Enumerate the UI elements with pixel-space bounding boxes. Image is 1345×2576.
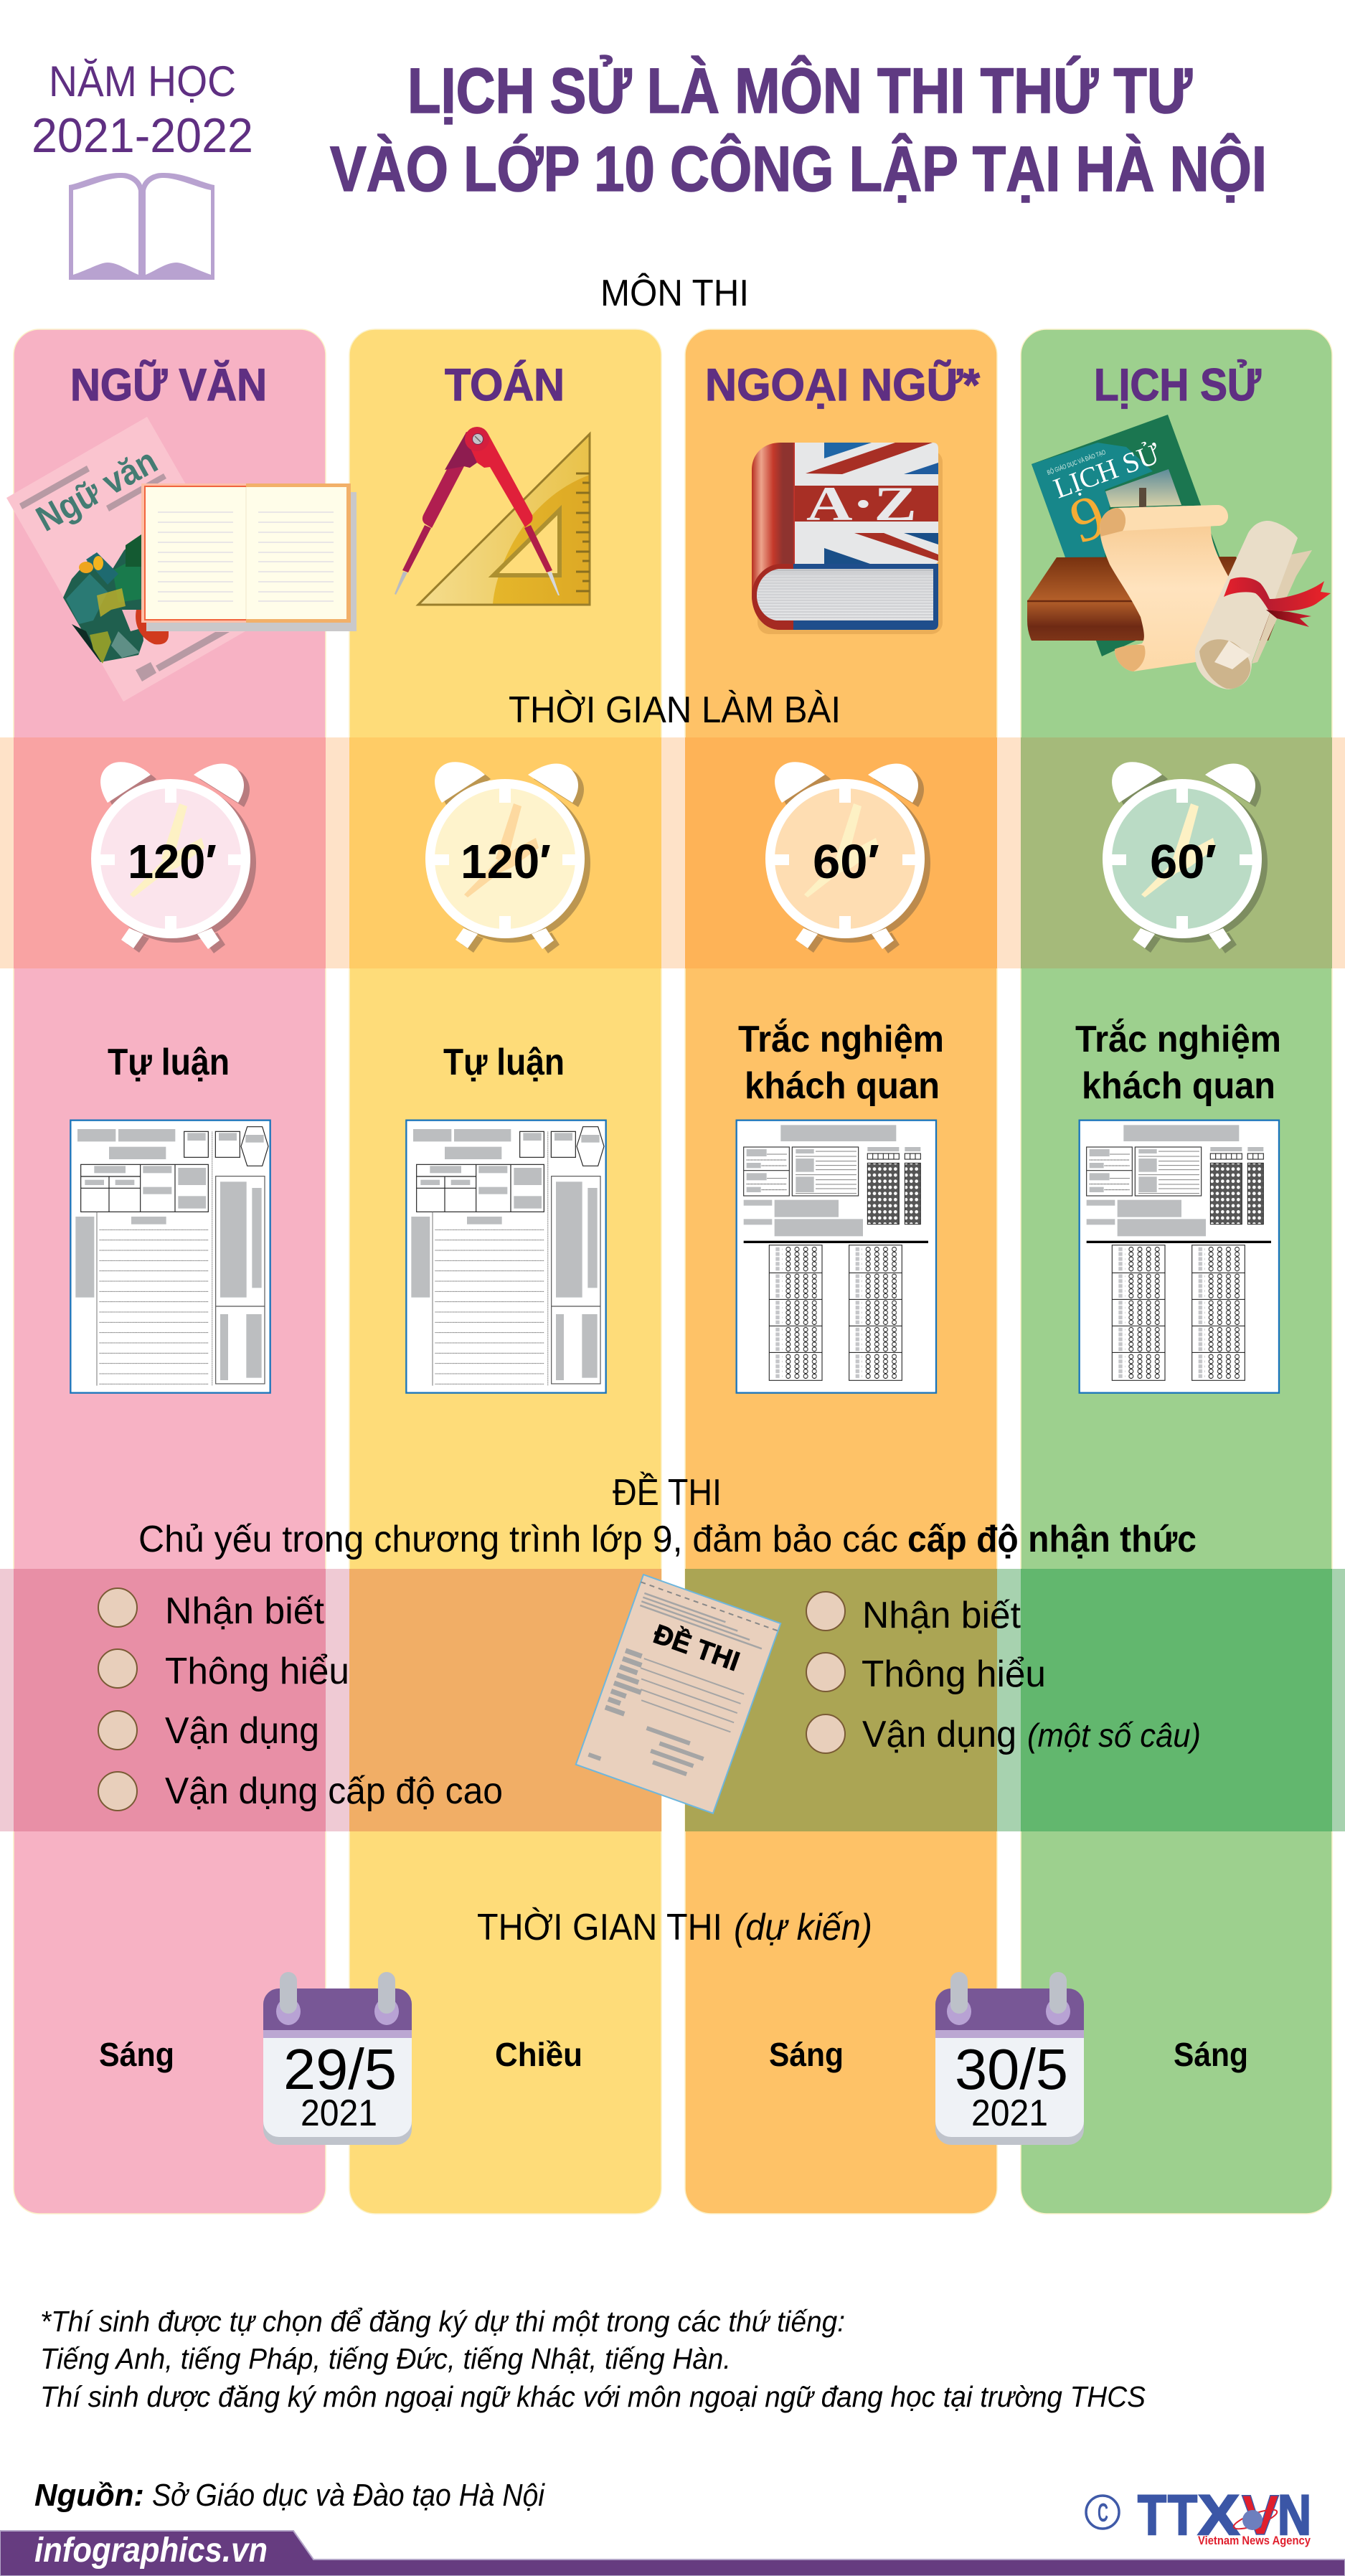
exam format labels: khách quan <box>745 1065 940 1107</box>
icon: history textbook, scrolls: 9 <box>1062 481 1114 557</box>
list: cognitive levels, Ngữ văn and Toán: Vận dụng cấp độ cao <box>165 1770 503 1812</box>
footnote: *Thí sinh được tự chọn để đăng ký dự thi một trong các thứ tiếng: <box>40 2305 845 2338</box>
exam format labels: Tự luận <box>443 1042 565 1083</box>
icon: English dictionary <box>752 443 943 634</box>
heading: đề thi: ĐỀ THI <box>613 1471 722 1514</box>
logo: TTXVN <box>1086 2483 1311 2547</box>
session labels: Sáng <box>99 2036 174 2073</box>
logo: TTXVN: C <box>1098 2498 1108 2527</box>
title: LỊCH SỬ LÀ MÔN THI THỨ TƯ <box>407 55 1192 126</box>
icon: Ngữ văn textbook and notebook: Ngữ văn <box>29 440 164 539</box>
list: cognitive levels, Ngoại ngữ and Lịch sử: Nhận biết <box>862 1595 1021 1636</box>
answer sheet: Ngoại ngữ <box>737 1120 936 1393</box>
logo: TTXVN: N <box>1278 2483 1311 2547</box>
footnote: Thí sinh dược đăng ký môn ngoại ngữ khác với môn ngoại ngữ đang học tại trường THCS <box>40 2380 1146 2413</box>
icon: clock 120 minutes, Ngữ văn: 120′ <box>128 835 217 889</box>
logo: TTXVN: T <box>1168 2483 1197 2547</box>
icon: clock 120 minutes, Toán: 120′ <box>461 835 551 889</box>
exam format labels: Trắc nghiệm <box>738 1018 944 1060</box>
session labels <box>99 2036 1248 2073</box>
subject headings <box>70 359 1262 410</box>
list: cognitive levels, Ngoại ngữ and Lịch sử: Vận dụng <box>862 1714 1016 1755</box>
title <box>330 55 1267 204</box>
source: Nguồn: <box>34 2478 144 2513</box>
source: Sở Giáo dục và Đào tạo Hà Nội <box>152 2478 545 2513</box>
answer sheet: Ngữ văn <box>70 1120 270 1393</box>
heading: thời gian thi: (dự kiến) <box>734 1907 872 1948</box>
list: cognitive levels, Ngữ văn and Toán: Vận dụng <box>165 1710 319 1752</box>
heading: thời gian thi: THỜI GIAN THI <box>477 1907 722 1948</box>
school year label: 2021-2022 <box>32 108 253 163</box>
panel: subject column Lịch sử <box>1021 329 1332 2214</box>
exam scope description: Chủ yếu trong chương trình lớp 9, đảm bảo các <box>138 1519 898 1560</box>
icon: calendar 29/5/2021 <box>263 1972 412 2145</box>
icon: exam paper <box>576 1575 780 1813</box>
logo: TTXVN: Vietnam News Agency <box>1198 2534 1311 2547</box>
subject headings: TOÁN <box>445 360 565 410</box>
icon: English dictionary: A·Z <box>806 476 917 531</box>
list: cognitive levels, Ngữ văn and Toán: Nhận biết <box>165 1590 325 1632</box>
list: cognitive levels, Ngữ văn and Toán <box>98 1588 503 1812</box>
list: cognitive levels, Ngữ văn and Toán: Thông hiểu <box>165 1651 349 1692</box>
panel: subject column Toán <box>349 329 661 2214</box>
logo: TTXVN: T <box>1138 2483 1166 2547</box>
panel: subject column Ngoại ngữ <box>685 329 997 2214</box>
exam format labels: Tự luận <box>108 1042 230 1083</box>
exam scope description: cấp độ nhận thức <box>907 1519 1197 1560</box>
answer sheet: Toán <box>406 1120 606 1393</box>
icon: clock 120 minutes, Ngữ văn <box>91 762 256 953</box>
session labels: Chiều <box>495 2036 582 2073</box>
icon: calendar 30/5/2021: 30/5 <box>955 2037 1068 2101</box>
footnote <box>40 2305 1146 2413</box>
icon: clock 60 minutes, Ngoại ngữ: 60′ <box>813 835 879 889</box>
icon: calendar 29/5/2021: 2021 <box>301 2093 377 2134</box>
heading: môn thi: MÔN THI <box>600 273 749 314</box>
footer bar <box>0 2531 1345 2576</box>
subject headings: NGỮ VĂN <box>70 359 267 410</box>
icon: history textbook, scrolls: BỘ GIÁO DỤC VÀ ĐÀO TẠO <box>1046 448 1106 476</box>
icon: calendar 29/5/2021: 29/5 <box>283 2037 397 2101</box>
exam format labels: khách quan <box>1082 1065 1275 1107</box>
list: cognitive levels, Ngoại ngữ and Lịch sử: Thông hiểu <box>862 1653 1046 1695</box>
footer bar: infographics.vn <box>34 2532 268 2570</box>
panel: subject column Ngữ văn <box>14 329 326 2214</box>
logo: TTXVN: X <box>1198 2483 1240 2547</box>
icon: clock 60 minutes, Lịch sử <box>1103 762 1268 953</box>
icon: clock 60 minutes, Ngoại ngữ <box>765 762 930 953</box>
icon: history textbook, scrolls: LỊCH SỬ <box>1049 437 1164 504</box>
band: cognitive levels <box>0 1569 1345 1831</box>
heading: thời gian làm bài: THỜI GIAN LÀM BÀI <box>509 689 841 731</box>
icon: clock 120 minutes, Toán <box>425 762 590 953</box>
subject headings: LỊCH SỬ <box>1094 359 1262 410</box>
icon: open book <box>69 173 214 280</box>
band: exam duration <box>0 737 1345 968</box>
session labels: Sáng <box>769 2036 844 2073</box>
icon: calendar 30/5/2021: 2021 <box>971 2093 1048 2134</box>
school year label <box>32 57 253 163</box>
icon: exam paper: ĐỀ THI <box>649 1618 744 1677</box>
icon: Ngữ văn textbook and notebook <box>6 417 357 702</box>
session labels: Sáng <box>1174 2036 1248 2073</box>
logo: TTXVN: V <box>1242 2483 1279 2547</box>
school year label: NĂM HỌC <box>49 57 236 105</box>
icon: compass and set square <box>395 427 590 605</box>
subject headings: NGOẠI NGỮ* <box>705 359 980 410</box>
icon: calendar 30/5/2021 <box>935 1972 1084 2145</box>
footnote: Tiếng Anh, tiếng Pháp, tiếng Đức, tiếng Nhật, tiếng Hàn. <box>40 2342 731 2375</box>
list: cognitive levels, Ngoại ngữ and Lịch sử <box>806 1592 1201 1755</box>
icon: clock 60 minutes, Lịch sử: 60′ <box>1150 835 1217 889</box>
icon: history textbook, scrolls <box>1027 415 1331 689</box>
answer sheet: Lịch sử <box>1080 1120 1279 1393</box>
list: cognitive levels, Ngoại ngữ and Lịch sử: (một số câu) <box>1027 1717 1201 1754</box>
exam format labels: Trắc nghiệm <box>1075 1018 1281 1060</box>
heading: thời gian thi <box>477 1907 872 1948</box>
exam format labels <box>108 1018 1281 1107</box>
